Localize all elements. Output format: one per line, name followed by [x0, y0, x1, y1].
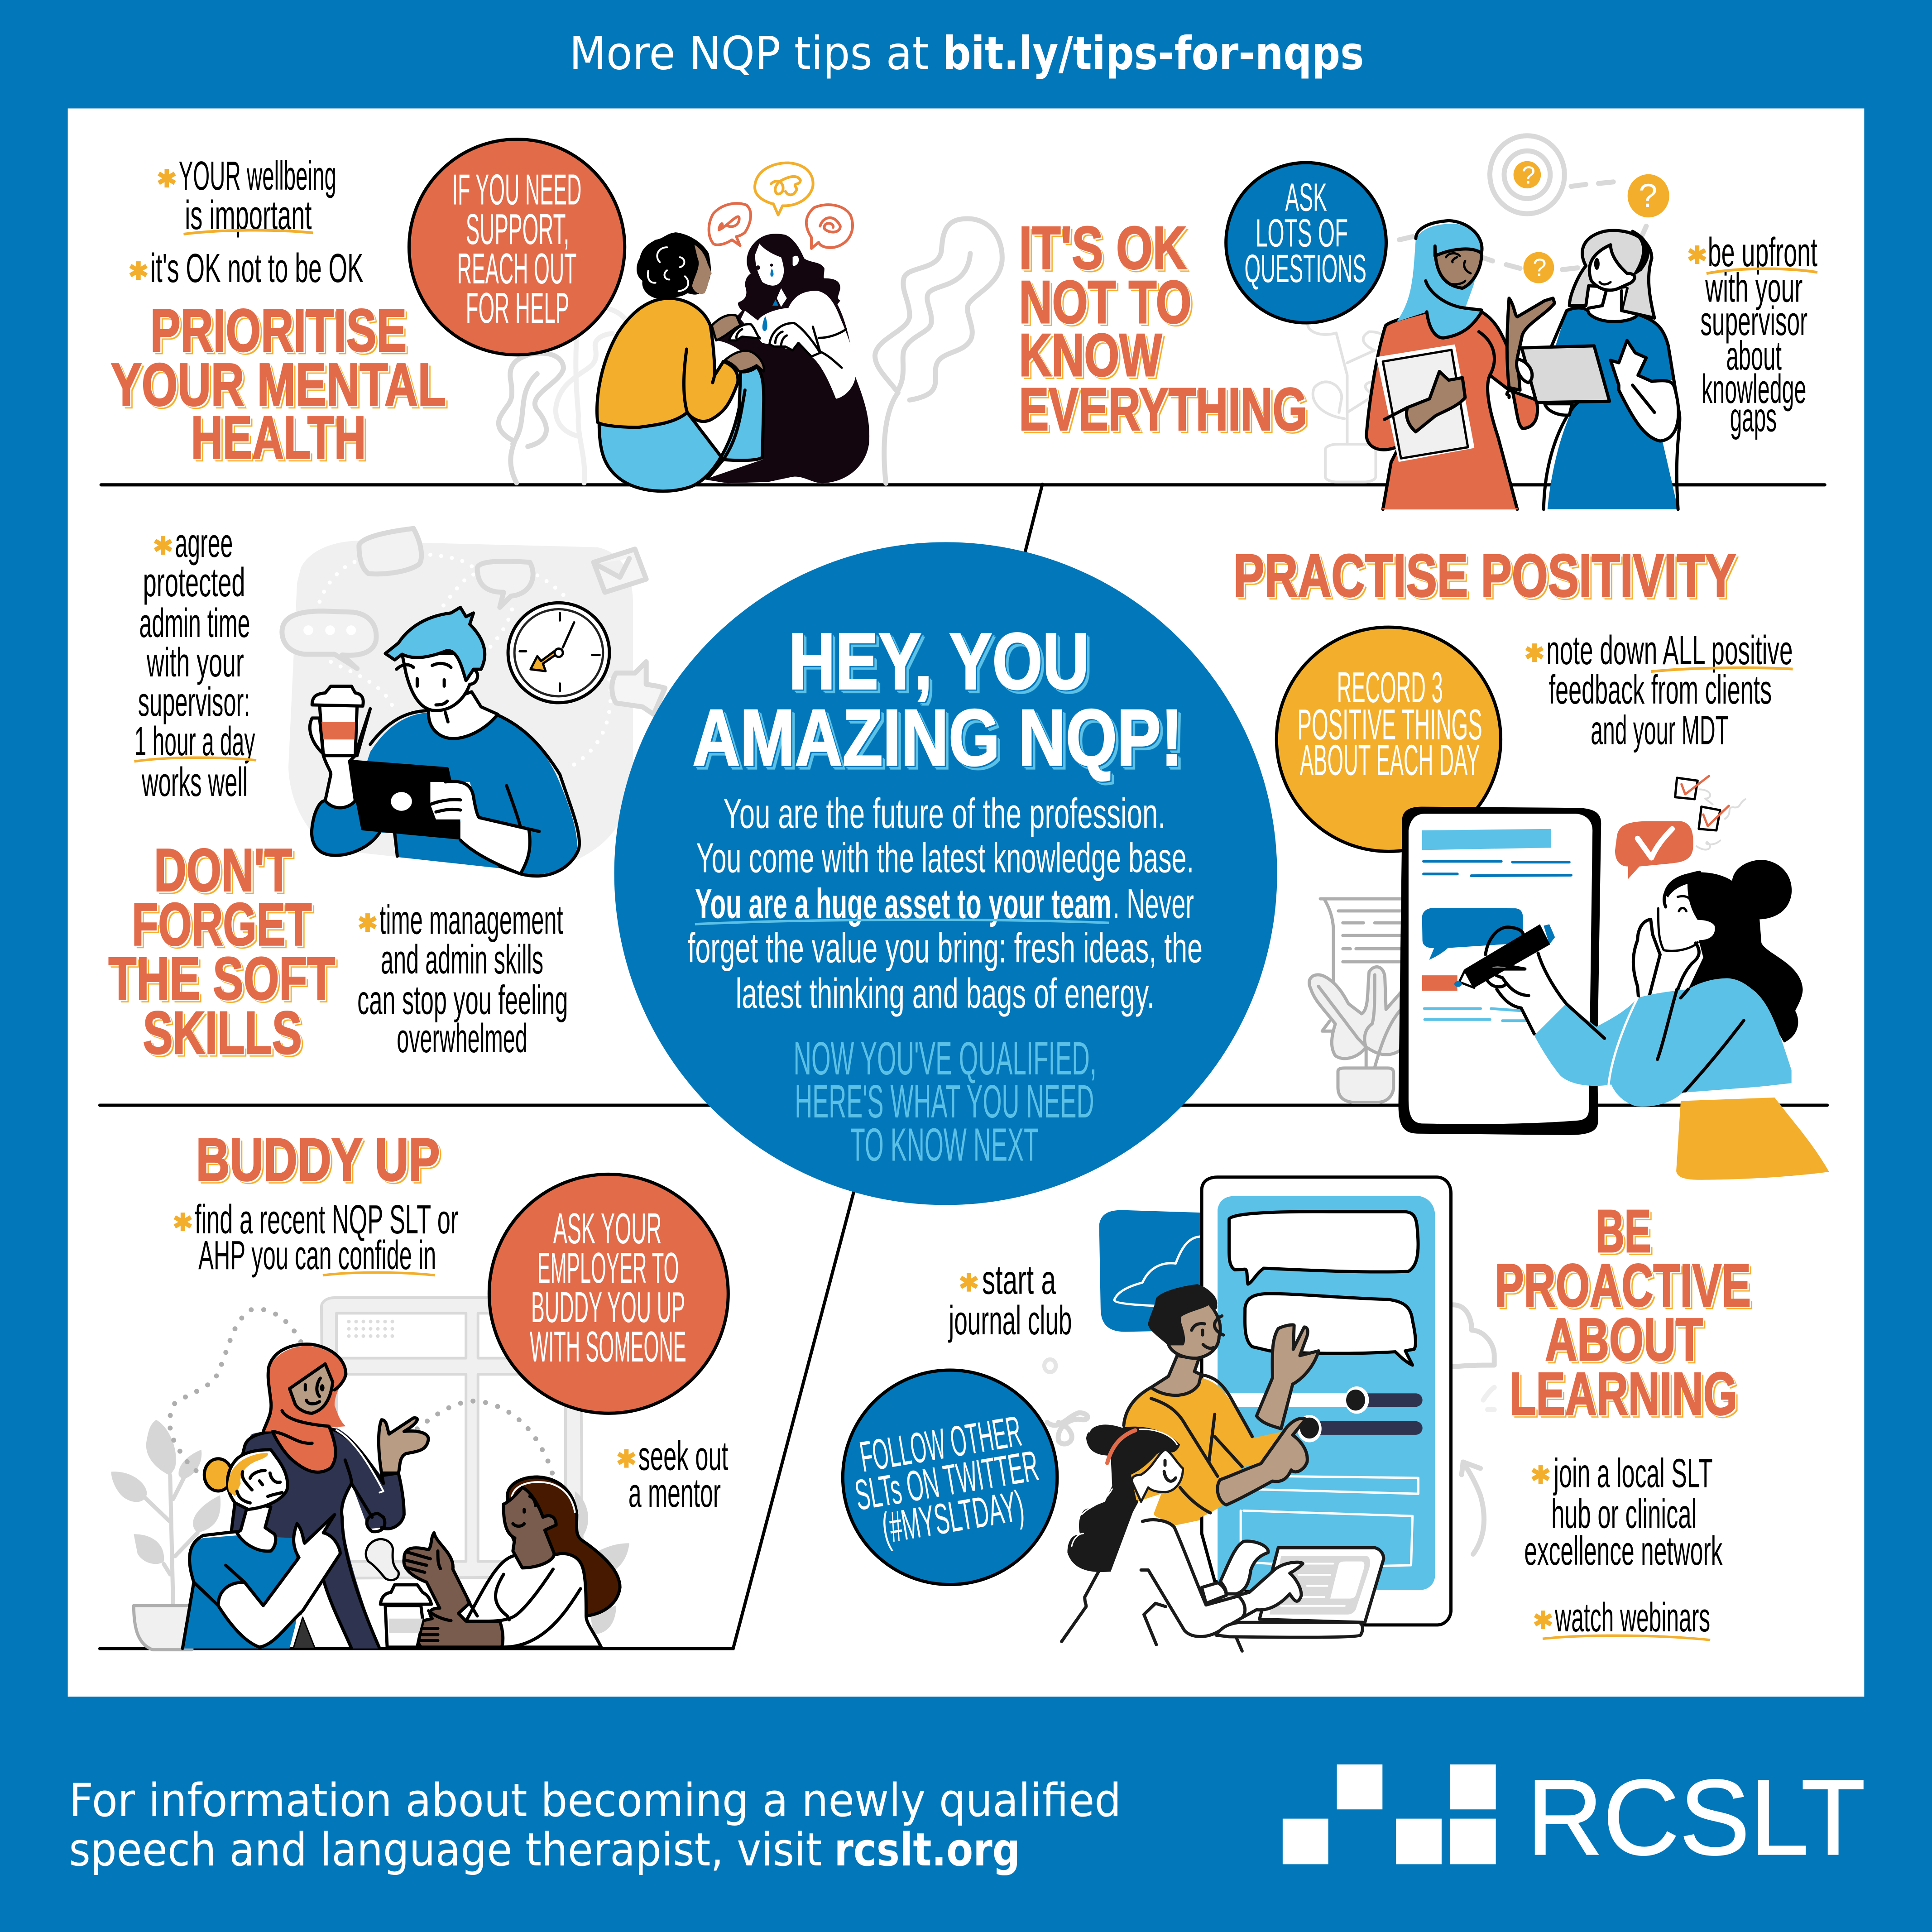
- bullet: watch webinars: watch webinars: [1555, 1595, 1710, 1640]
- woman two: hair and face: [1569, 230, 1654, 318]
- callout: record 3 positive things: RECORD 3: [1337, 664, 1443, 712]
- coffee cup: [320, 705, 357, 756]
- callout: ask your employer to buddy you up: [489, 1174, 728, 1413]
- panel: be proactive about learning: [843, 1177, 1751, 1651]
- coffee hand and arm: [310, 709, 370, 808]
- callout: record 3 positive things: [1276, 627, 1501, 851]
- laptop: [1260, 1548, 1384, 1622]
- woman in yellow: jumper: [597, 298, 738, 427]
- bullet: protected admin time: supervisor:: [138, 680, 250, 725]
- speech bubble with tick: [1615, 821, 1693, 879]
- illustration: three colleagues chatting: [111, 1298, 629, 1650]
- heading: practise positivity: PRACTISE POSITIVITY: [1233, 542, 1736, 609]
- central sub-heading: TO KNOW NEXT: [850, 1118, 1039, 1170]
- header link text: [569, 27, 1364, 80]
- callout: record 3 positive things: POSITIVE THINGS: [1298, 701, 1482, 749]
- callout: follow other slts on twitter: (#MYSLTDAY): [878, 1481, 1027, 1553]
- bullet: seek out a mentor: [616, 1434, 728, 1516]
- central sub-heading: [794, 1032, 1097, 1170]
- panel: buddy up: [111, 1126, 728, 1650]
- callout: if you need support: FOR HELP: [466, 284, 569, 332]
- heading: prioritise your mental health: PRIORITISE: [150, 297, 407, 364]
- callout: ask your employer to buddy you up: EMPLOYER TO: [537, 1244, 679, 1292]
- bullets: wellbeing: is important: [185, 193, 312, 238]
- central message: forget the value you bring: fresh ideas, the: [687, 924, 1203, 971]
- central circle: hey you amazing nqp: [614, 542, 1277, 1205]
- callout: ask your employer to buddy you up: BUDDY YOU UP: [531, 1284, 685, 1332]
- heading: be proactive about learning: ABOUT: [1545, 1306, 1703, 1373]
- heading: it's ok not to know everything: EVERYTHING: [1019, 376, 1307, 443]
- callout: ask lots of questions: ASK: [1285, 175, 1327, 219]
- plant: [111, 1420, 629, 1634]
- heading: be proactive about learning: [1495, 1198, 1751, 1428]
- heading: don't forget the soft skills: DON'T: [154, 837, 292, 904]
- illustration: woman writing on phone screen: [1309, 776, 1829, 1180]
- bullet: find a recent nqp: ✱: [173, 1208, 193, 1237]
- callout: ask lots of questions: [1226, 163, 1386, 323]
- bullet: note down all positive feedback: and your MDT: [1591, 708, 1729, 753]
- grey background doodles: [1047, 1305, 1494, 1554]
- bullet: be upfront: gaps: [1730, 395, 1777, 440]
- bullet: protected admin time: agree: [175, 521, 233, 566]
- bullet: time management: ✱: [357, 908, 378, 937]
- header link text: bit.ly/tips-for-nqps: [943, 27, 1364, 80]
- dotted paths: [170, 1309, 301, 1473]
- blonde woman neck and head: [237, 1503, 276, 1551]
- heading: don't forget the soft skills: THE SOFT: [108, 945, 335, 1012]
- sliders: [1226, 1393, 1416, 1407]
- heading: prioritise your mental health: HEALTH: [191, 404, 366, 471]
- chat bubbles: [1229, 1212, 1418, 1284]
- seated woman top: [466, 1553, 601, 1647]
- paper and plant: [1320, 899, 1403, 1031]
- hijab woman body: [231, 1427, 404, 1649]
- bullet: find a recent nqp: [173, 1197, 458, 1278]
- seated woman face: [503, 1487, 556, 1568]
- bullet: time management: overwhelmed: [397, 1016, 527, 1061]
- plant right: [875, 219, 1002, 483]
- woman two: arm and tablet: [1611, 340, 1678, 441]
- central heading: AMAZING NQP!: [692, 693, 1183, 782]
- callout: if you need support: REACH OUT: [457, 245, 577, 293]
- logo: rcslt: [1283, 1758, 1865, 1878]
- illustration: plants left: [499, 309, 630, 483]
- central heading: HEY, YOU: [789, 617, 1089, 706]
- central sub-heading: NOW YOU'VE QUALIFIED,: [794, 1032, 1097, 1084]
- panel: don't forget the soft skills: [108, 521, 665, 1067]
- woman hair: [1664, 860, 1803, 1043]
- thought bubbles: [755, 163, 813, 215]
- heading: be proactive about learning: PROACTIVE: [1495, 1252, 1751, 1319]
- grey backdrop: [288, 541, 633, 859]
- central heading: [692, 617, 1183, 782]
- bullet: find a recent nqp: find a recent NQP SLT or: [195, 1197, 458, 1242]
- callout: if you need support: IF YOU NEED: [452, 166, 581, 214]
- illustration: two people at a large screen: [1044, 1177, 1494, 1651]
- bullet: protected admin time: ✱: [153, 532, 173, 561]
- bullet: start a journal club: ✱: [959, 1268, 979, 1297]
- bullet: time management: can stop you feeling: [357, 978, 568, 1023]
- callout: ask lots of questions: QUESTIONS: [1245, 247, 1366, 291]
- bullets: wellbeing: it's OK not to be OK: [150, 246, 364, 291]
- bullet: note down all positive feedback: feedback from clients: [1549, 667, 1772, 713]
- header link text: More NQP tips at: [569, 27, 929, 80]
- heading: don't forget the soft skills: [108, 837, 335, 1067]
- woman in black: hands: [729, 324, 760, 340]
- bullet: start a journal club: journal club: [948, 1298, 1072, 1343]
- waist and skirt: [1681, 1086, 1774, 1101]
- callout: ask your employer to buddy you up: ASK YOUR: [553, 1205, 662, 1253]
- panel: practise positivity: [1233, 542, 1829, 1180]
- heading: buddy up: BUDDY UP: [196, 1126, 440, 1194]
- bullet: join a local slt hub: excellence network: [1524, 1529, 1723, 1574]
- footer text: rcslt.org: [834, 1823, 1020, 1876]
- bullet: time management: time management: [379, 898, 563, 943]
- blue card with cloud: [1099, 1210, 1202, 1332]
- bullets: wellbeing: YOUR wellbeing: [179, 153, 336, 199]
- central message: . Never: [1112, 880, 1194, 927]
- blonde woman shirt: [184, 1535, 301, 1649]
- central message: You are a huge asset to your team: [695, 880, 1112, 927]
- phone: [1399, 807, 1601, 1135]
- heading: prioritise your mental health: YOUR MENTAL: [111, 351, 446, 418]
- bullet: protected admin time: 1 hour a day: [134, 719, 255, 764]
- man raised hand: [1256, 1325, 1318, 1429]
- heading: be proactive about learning: BE: [1596, 1198, 1651, 1265]
- plant: [1308, 321, 1386, 444]
- writing arm and hand: [1489, 953, 1566, 1036]
- central message: You are the future of the profession.: [723, 790, 1165, 837]
- woman face: [1658, 884, 1715, 951]
- callout: follow other slts on twitter: FOLLOW OTHER: [857, 1407, 1025, 1481]
- woman hands: [1202, 1541, 1268, 1603]
- callout: if you need support: SUPPORT,: [466, 206, 569, 254]
- illustration: man with tablet and coffee: [282, 528, 665, 876]
- bullet: be upfront: with your: [1705, 266, 1803, 311]
- illustration: two colleagues with question marks: [1308, 136, 1680, 509]
- woman body: [1062, 1502, 1245, 1644]
- bullets: wellbeing: [128, 153, 364, 291]
- bullet: be upfront: knowledge: [1702, 367, 1806, 412]
- woman in yellow: trousers: [599, 366, 764, 491]
- bullet: seek out a mentor: seek out: [638, 1434, 728, 1479]
- bullet: join a local slt hub: ✱: [1530, 1460, 1551, 1489]
- woman hair: [1067, 1424, 1180, 1572]
- question marks: ?: [1639, 177, 1657, 214]
- bullet: start a journal club: start a: [982, 1257, 1056, 1303]
- bullet: protected admin time: admin time: [139, 601, 250, 646]
- bullet: find a recent nqp: AHP you can confide in: [198, 1233, 436, 1278]
- bullet: seek out a mentor: ✱: [616, 1444, 637, 1473]
- bullet: protected admin time: works well: [141, 760, 248, 805]
- central message: You come with the latest knowledge base.: [696, 834, 1194, 882]
- blonde woman arm: [218, 1515, 340, 1647]
- bullet: protected admin time: [134, 521, 256, 805]
- bullet: be upfront: be upfront: [1708, 230, 1817, 275]
- woman face: [1132, 1449, 1183, 1502]
- callout: follow other slts on twitter: [843, 1370, 1057, 1585]
- tablet: [350, 761, 462, 838]
- central message: [687, 790, 1203, 1017]
- heading: don't forget the soft skills: FORGET: [132, 891, 312, 958]
- coffee cup: [385, 1606, 423, 1647]
- panel: prioritise your mental health: [111, 139, 1002, 491]
- marker pen: [1544, 924, 1555, 944]
- callout: follow other slts on twitter: SLTs ON TWITTER: [852, 1442, 1042, 1520]
- central sub-heading: HERE'S WHAT YOU NEED: [795, 1075, 1094, 1127]
- man: [1114, 1378, 1281, 1525]
- woman in hijab: scarf: [1397, 224, 1482, 338]
- shoe / hand decorative: [366, 1539, 398, 1580]
- question marks: ?: [1533, 254, 1547, 282]
- central message: latest thinking and bags of energy.: [736, 970, 1155, 1017]
- callout: ask your employer to buddy you up: WITH SOMEONE: [530, 1323, 686, 1371]
- heading: don't forget the soft skills: SKILLS: [143, 999, 302, 1067]
- callout: if you need support: [409, 139, 625, 355]
- bullet: join a local slt hub: [1524, 1451, 1723, 1574]
- heading: it's ok not to know everything: NOT TO: [1019, 268, 1191, 336]
- woman in yellow: head: [637, 232, 711, 298]
- tablet hand: [430, 782, 528, 874]
- big screen: [1202, 1177, 1451, 1625]
- woman in black: [705, 234, 869, 483]
- woman in yellow: hands: [712, 315, 741, 340]
- dots on window: [349, 1322, 395, 1336]
- clock: [508, 603, 609, 703]
- grey bubbles and icons: [282, 611, 376, 668]
- man second arm and slider knob: [1297, 1415, 1322, 1443]
- bullet: time management: and admin skills: [381, 937, 543, 983]
- floor segment: [293, 1617, 315, 1649]
- hijab: [263, 1346, 346, 1472]
- bullet: be upfront: supervisor: [1700, 299, 1807, 344]
- bullet: be upfront: [1687, 230, 1817, 440]
- woman hand on chin: [1633, 919, 1660, 1001]
- footer text: speech and language therapist, visit: [69, 1823, 822, 1876]
- bullet: note down all positive feedback: [1524, 628, 1793, 753]
- white content panel: [68, 108, 1864, 1697]
- bullet: seek out a mentor: a mentor: [628, 1471, 721, 1516]
- divider lines: [100, 484, 1827, 1649]
- shirt: [312, 712, 577, 875]
- bullet: time management: [357, 898, 568, 1061]
- heading: prioritise your mental health: [111, 297, 446, 471]
- footer text: [69, 1774, 1121, 1876]
- dotted white ring: [320, 555, 611, 769]
- question marks: ?: [1522, 161, 1535, 189]
- panel: it's ok not to know everything: [1019, 136, 1817, 509]
- target rings and dashes: [1490, 136, 1564, 214]
- bullet: note down all positive feedback: ✱: [1524, 638, 1545, 667]
- bullet: protected admin time: protected: [143, 560, 245, 605]
- logo squares: [1283, 1764, 1496, 1864]
- window: [321, 1298, 582, 1578]
- callout: ask lots of questions: LOTS OF: [1256, 211, 1348, 255]
- seated woman hair: [507, 1477, 620, 1616]
- woman in hijab: raised hand: [1507, 298, 1555, 390]
- bullet: start a journal club: [948, 1257, 1072, 1343]
- heading: it's ok not to know everything: IT'S OK: [1019, 214, 1187, 282]
- woman in hijab: hand: [1406, 371, 1465, 432]
- logo wordmark: RCSLT: [1527, 1758, 1865, 1878]
- jumper: [1534, 978, 1792, 1107]
- woman two: dress: [1548, 308, 1678, 509]
- bullet: protected admin time: with your: [146, 640, 244, 686]
- seated woman hands: [404, 1533, 503, 1647]
- heading: it's ok not to know everything: [1019, 214, 1307, 443]
- callout: record 3 positive things: ABOUT EACH DAY: [1300, 737, 1480, 785]
- woman in hijab: tablet: [1377, 345, 1473, 461]
- form fields: [1241, 1477, 1418, 1567]
- bullet: join a local slt hub: hub or clinical: [1551, 1491, 1697, 1537]
- footer text: For information about becoming a newly qualified: [69, 1774, 1121, 1827]
- raised hand: [379, 1418, 428, 1473]
- heading: be proactive about learning: LEARNING: [1510, 1360, 1737, 1428]
- illustration: two women talking: [597, 163, 1002, 491]
- bullets: wellbeing: ✱: [128, 257, 149, 286]
- woman in hijab: face: [1435, 246, 1481, 288]
- neck and head: [428, 692, 498, 739]
- bullets: wellbeing: ✱: [157, 164, 177, 193]
- bullet: join a local slt hub: join a local SLT: [1553, 1451, 1713, 1496]
- hijab woman face: [289, 1364, 333, 1413]
- bullet: watch webinars: ✱: [1533, 1606, 1553, 1635]
- heading: it's ok not to know everything: KNOW: [1019, 321, 1162, 389]
- bullet: watch webinars: [1533, 1595, 1710, 1640]
- bullet: be upfront: about: [1726, 333, 1782, 379]
- bullet: be upfront: ✱: [1687, 240, 1707, 269]
- checkboxes: [1675, 778, 1697, 799]
- woman in hijab: dress: [1366, 312, 1538, 509]
- question marks: [1522, 161, 1657, 282]
